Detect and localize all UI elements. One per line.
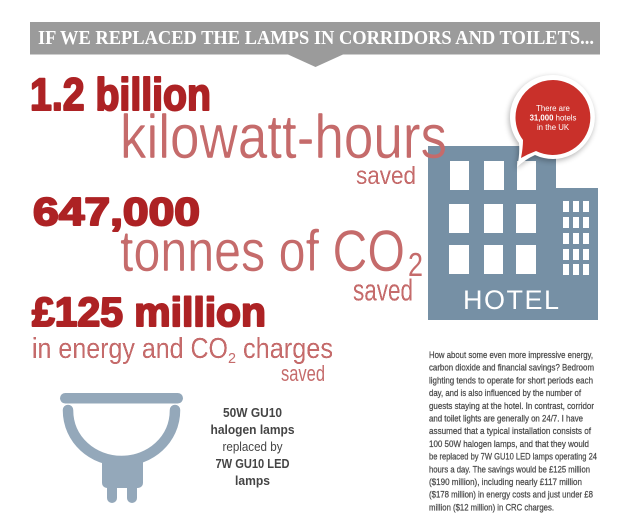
text block: savings explanation: [429, 350, 598, 513]
text block: savings explanation: and toilet lights are generally on 24/7. I have: [429, 414, 583, 424]
text: lamp replacement note: 7W GU10 LED: [216, 456, 290, 471]
text block: savings explanation: How about some even more impressive energy,: [429, 350, 593, 361]
callout: 31,000 hotels: [509, 75, 595, 169]
icon: hotel building: [428, 146, 598, 320]
text block: savings explanation: ($178 million) in energy costs and just under £8: [429, 490, 593, 501]
text: lamp replacement note: lamps: [235, 473, 270, 488]
text block: savings explanation: lighting tends to operate for short periods each: [429, 375, 593, 386]
text: lamp replacement note: 50W GU10: [223, 405, 282, 420]
stat: 125 million in charges saved: charges: [243, 333, 333, 365]
heading banner: [30, 22, 600, 67]
stat: 125 million in charges saved: [32, 289, 333, 386]
stat: tonnes of CO2 saved: saved: [353, 272, 413, 308]
text block: savings explanation: 100 50W halogen lamps, and that they would: [429, 439, 589, 450]
text: lamp replacement note: replaced by: [222, 439, 283, 454]
stat: tonnes of CO2 saved: 647,000: [33, 191, 200, 234]
text block: savings explanation: carbon dioxide and financial savings? Bedroom: [429, 363, 594, 374]
stat: kilowatt-hours saved: saved: [356, 162, 416, 190]
stat: 125 million in charges saved: £125 million: [32, 289, 266, 335]
stat: 125 million in charges saved: in energy and CO: [32, 333, 228, 365]
stat: kilowatt-hours saved: kilowatt-hours: [120, 103, 447, 172]
heading banner: IF WE REPLACED THE LAMPS IN CORRIDORS AND TOILETS...: [38, 27, 594, 49]
text block: savings explanation: ($190 million), including nearly £117 million: [429, 477, 582, 488]
callout: 31,000 hotels: in the UK: [537, 123, 570, 132]
text: lamp replacement note: [210, 405, 294, 488]
text block: savings explanation: assumed that a typical installation consists of: [429, 426, 591, 437]
stat: tonnes of CO2 saved: [33, 191, 423, 308]
stat: 125 million in charges saved: saved: [281, 361, 325, 386]
stat: kilowatt-hours saved: [30, 69, 447, 190]
icon: hotel building: HOTEL: [463, 285, 559, 315]
text block: savings explanation: guests staying at the hotel. In contrast, corridor: [429, 401, 595, 412]
stat: 125 million in charges saved: 2: [228, 350, 236, 367]
callout: 31,000 hotels: There are: [536, 104, 570, 113]
text block: savings explanation: day, and is also influenced by the number of: [429, 388, 581, 399]
stat: kilowatt-hours saved: 1.2 billion: [30, 69, 211, 120]
text block: savings explanation: million ($12 million) in CRC charges.: [429, 502, 554, 513]
stat: tonnes of CO2 saved: tonnes of CO: [120, 219, 405, 284]
text block: savings explanation: hours a day. The savings would be £125 million: [429, 464, 590, 475]
text: lamp replacement note: halogen lamps: [210, 422, 294, 437]
stat: tonnes of CO2 saved: 2: [408, 246, 423, 283]
icon: GU10 lamp: [60, 393, 183, 503]
callout: 31,000 hotels: 31,000 hotels: [530, 114, 577, 122]
